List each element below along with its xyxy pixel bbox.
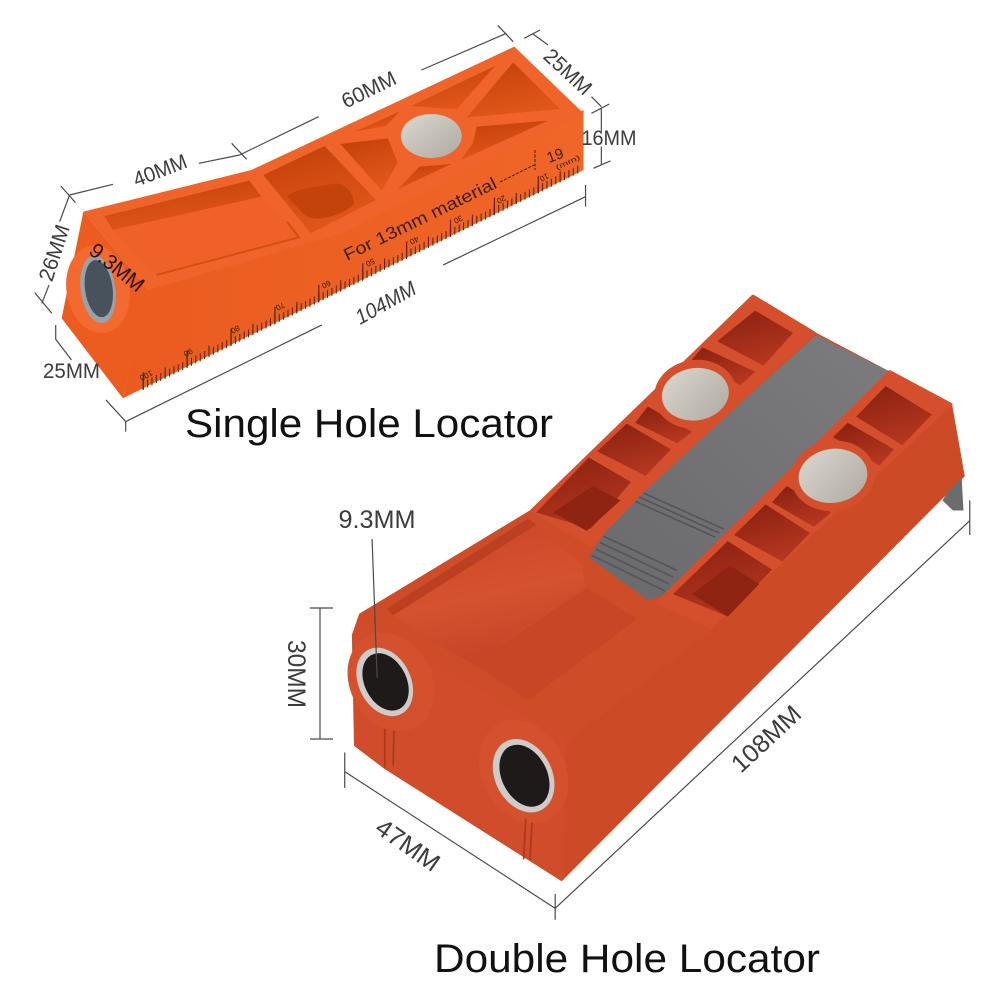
label 16MM: 16MM (582, 127, 636, 150)
magnet (401, 114, 462, 158)
right pocket floor (692, 566, 759, 617)
single hole locator product (35, 25, 610, 432)
left magnet ring (649, 354, 742, 435)
ruler numbers: 40 (408, 234, 420, 247)
triangle pockets around magnet (340, 62, 560, 191)
ruler numbers (138, 171, 550, 383)
ramp rim groove (387, 519, 536, 615)
label 108MM: 108MM (726, 700, 807, 778)
oval drill slot (287, 183, 354, 219)
dimension 30MM lines (310, 608, 333, 739)
ramp edge shadow (157, 222, 299, 275)
base silhouette (353, 296, 963, 880)
gray steel bar (589, 335, 890, 600)
label 25MM lower: 25MM (43, 360, 100, 383)
gray end tab (942, 472, 963, 511)
label 9.3MM double: 9.3MM (338, 506, 416, 534)
right magnet (794, 444, 872, 508)
front face (62, 212, 149, 398)
hole boss (61, 243, 135, 336)
label 26MM: 26MM (35, 222, 75, 284)
right magnet ring (785, 434, 881, 517)
grooved bar end (592, 492, 724, 591)
long slot pocket (104, 181, 261, 230)
right rail pockets (673, 386, 932, 617)
label 40MM: 40MM (130, 150, 191, 192)
ruler ticks (143, 163, 582, 386)
label 47MM: 47MM (370, 813, 445, 878)
label 25MM top: 25MM (539, 44, 596, 100)
material label: For 13mm material (340, 174, 500, 265)
ramp recess (113, 197, 299, 275)
steel bushing (76, 254, 120, 325)
right hole boss (462, 706, 585, 838)
right bushing (481, 729, 566, 822)
title: double hole locator: Double Hole Locator (434, 937, 820, 981)
ruler numbers: 80 (229, 323, 241, 336)
ruler numbers: 10 (538, 171, 550, 184)
side ruler face (123, 110, 584, 398)
dimension lines (345, 500, 970, 920)
double hole locator product (331, 296, 970, 920)
square pocket (263, 146, 376, 233)
left bushing (345, 639, 424, 725)
dimension lines (35, 25, 610, 432)
cylinder ramp (393, 525, 585, 664)
front slits (385, 729, 532, 859)
left magnet (658, 363, 733, 426)
left rail (532, 296, 814, 545)
title: single hole locator: Single Hole Locator (185, 402, 553, 446)
ruler numbers: 60 (320, 278, 332, 291)
left rail pockets (536, 311, 793, 529)
ruler numbers: 50 (364, 256, 376, 269)
marker unit: (mm) (555, 154, 581, 172)
label 104MM: 104MM (351, 277, 421, 329)
ruler numbers: 70 (274, 300, 286, 313)
label 60MM: 60MM (338, 67, 400, 113)
right bushing hole (490, 737, 559, 815)
label 9.3MM single: 9.3MM (84, 239, 149, 297)
magnet ring (394, 109, 469, 163)
label 30MM: 30MM (282, 640, 310, 708)
front face (353, 619, 566, 880)
left pocket floor (553, 486, 620, 531)
dotted arrow to marker (500, 150, 535, 182)
bushing hole (81, 259, 116, 318)
left hole boss (331, 619, 451, 745)
marker 19: 19 (545, 145, 566, 167)
side face (561, 404, 963, 880)
ramp recess (473, 588, 637, 700)
ruler numbers: 100 (138, 368, 154, 383)
ruler numbers: 30 (452, 213, 464, 226)
ruler numbers: 90 (182, 346, 194, 359)
right rail (658, 372, 951, 627)
top face (83, 47, 584, 290)
left bushing hole (353, 646, 418, 718)
ruler numbers: 20 (495, 193, 507, 206)
